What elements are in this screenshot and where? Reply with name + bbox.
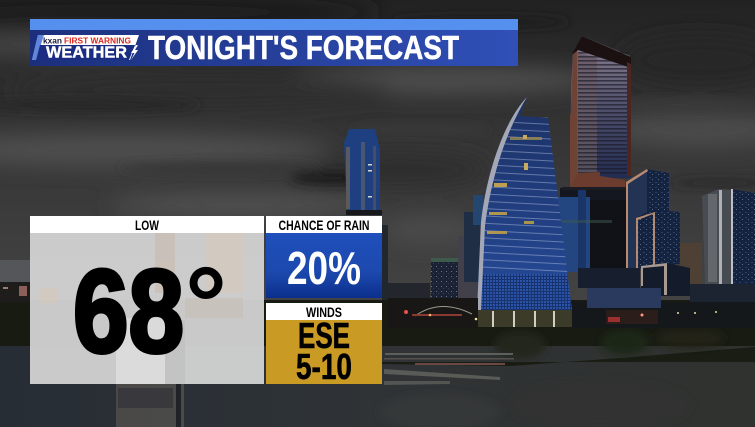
panel: low temperature	[30, 216, 264, 384]
logo: KXAN First Warning Weather	[32, 35, 139, 62]
skyline: stepped building	[626, 169, 690, 296]
low label	[30, 216, 264, 233]
panel: winds	[266, 303, 382, 387]
title text: TONIGHT'S FORECAST	[148, 29, 459, 66]
skyline: dark podium building	[558, 187, 627, 275]
panel: chance of rain: 20%	[287, 242, 361, 294]
panel: winds: WINDS	[306, 304, 342, 320]
panel: winds: ESE	[298, 315, 350, 356]
skyline: sail-shaped glass building	[477, 97, 572, 327]
low temperature value: °	[185, 246, 227, 363]
low temperature value: 68	[73, 246, 184, 378]
logo: KXAN First Warning Weather: FIRST WARNING	[64, 36, 131, 46]
skyline: small mid-ground buildings	[388, 195, 702, 318]
logo: KXAN First Warning Weather: kxan	[43, 36, 62, 46]
skyline: waterfront low buildings and lights	[388, 268, 755, 328]
skyline: left blue tower	[344, 129, 388, 300]
panel: chance of rain: CHANCE OF RAIN	[278, 217, 370, 233]
left shore city lights	[0, 260, 30, 302]
panel: chance of rain	[266, 216, 382, 298]
title banner	[30, 19, 518, 66]
skyline: tall copper tower	[570, 36, 631, 191]
low label: LOW	[135, 217, 160, 233]
skyline: right tower	[690, 189, 755, 302]
water and river bank	[0, 260, 755, 427]
building seen below low panel	[116, 384, 184, 427]
panel: winds: 5-10	[296, 346, 352, 387]
logo: KXAN First Warning Weather: WEATHER	[46, 44, 127, 62]
